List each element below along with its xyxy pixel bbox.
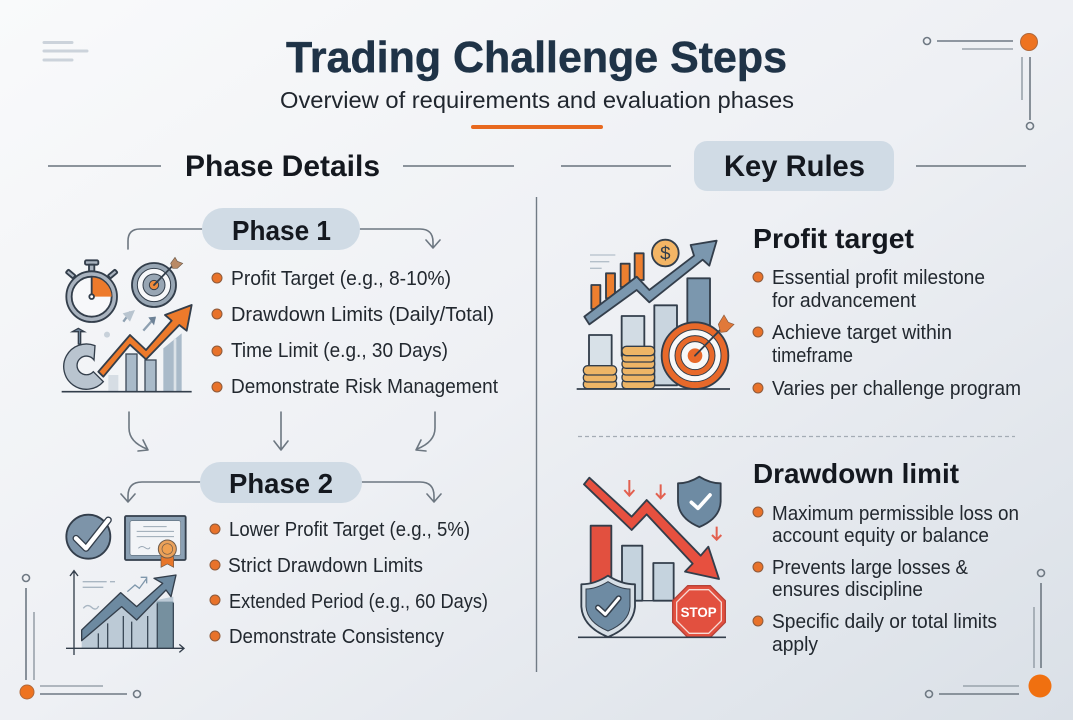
Drawdown limit bullet list: ensures discipline xyxy=(772,579,923,601)
Phase 1 pill xyxy=(202,208,360,250)
icon: profit chart, coins and target: $ xyxy=(660,243,671,264)
icon: stopwatch, target and rising arrow xyxy=(62,257,192,392)
Profit target bullet list: Essential profit milestone xyxy=(772,267,985,289)
icon: falling arrow, shields and stop sign xyxy=(578,477,726,637)
panel: Drawdown limit xyxy=(578,458,1019,656)
Profit target bullet list: Varies per challenge program xyxy=(772,378,1021,400)
Profit target bullet list: Achieve target within xyxy=(772,322,952,344)
subtitle: Overview of requirements and evaluation phases xyxy=(280,87,794,113)
column divider xyxy=(536,197,538,672)
Phase 1 bullet list xyxy=(212,268,498,398)
Phase 2 bullet list: Extended Period (e.g., 60 Days) xyxy=(229,591,488,613)
Phase 2 bullet list xyxy=(210,519,488,648)
Drawdown limit bullet list: Prevents large losses & xyxy=(772,557,969,579)
Phase 1 bullet list: Demonstrate Risk Management xyxy=(231,376,498,398)
Phase 1 bullet list: Time Limit (e.g., 30 Days) xyxy=(231,340,448,362)
corner ornament: bottom right xyxy=(926,570,1052,698)
corner ornament: top right xyxy=(924,34,1038,130)
row divider xyxy=(578,436,1015,438)
Phase 2 pill xyxy=(200,462,362,503)
panel: Phase 1 xyxy=(62,208,498,398)
arrows: Phase 1 to Phase 2 xyxy=(129,412,435,451)
heading: Key Rules xyxy=(561,141,1026,191)
corner ornament: bottom left xyxy=(20,574,140,699)
title: Trading Challenge Steps xyxy=(286,33,787,82)
Drawdown limit bullet list: account equity or balance xyxy=(772,525,989,547)
Profit target bullet list xyxy=(753,267,1021,400)
heading: Key Rules: Key Rules xyxy=(724,150,865,183)
Drawdown limit bullet list: apply xyxy=(772,634,818,656)
Drawdown limit bullet list: Maximum permissible loss on xyxy=(772,503,1019,525)
panel: Phase 2 xyxy=(66,462,488,655)
panel: Profit target xyxy=(577,223,1021,400)
Phase 1 pill: Phase 1 xyxy=(232,215,331,246)
title accent bar xyxy=(471,125,603,129)
Phase 2 bullet list: Lower Profit Target (e.g., 5%) xyxy=(229,519,470,541)
Phase 2 bullet list: Demonstrate Consistency xyxy=(229,626,444,648)
icon: profit chart, coins and target xyxy=(577,240,734,389)
Phase 2 bullet list: Strict Drawdown Limits xyxy=(228,555,423,577)
Phase 2 connectors xyxy=(121,482,441,502)
heading: Drawdown limit: Drawdown limit xyxy=(753,458,959,489)
Drawdown limit bullet list: Specific daily or total limits xyxy=(772,611,997,633)
icon: top-left menu lines xyxy=(44,42,87,60)
icon: checkmark, certificate and chart xyxy=(66,515,186,655)
heading: Phase Details: Phase Details xyxy=(185,150,380,183)
Phase 1 bullet list: Drawdown Limits (Daily/Total) xyxy=(231,304,494,326)
Profit target bullet list: for advancement xyxy=(772,290,916,312)
Phase 2 pill: Phase 2 xyxy=(229,468,333,499)
Profit target bullet list: timeframe xyxy=(772,345,853,367)
Phase 1 bullet list: Profit Target (e.g., 8-10%) xyxy=(231,268,451,290)
Drawdown limit bullet list xyxy=(753,503,1019,656)
heading: Profit target: Profit target xyxy=(753,223,914,254)
icon: falling arrow, shields and stop sign: STOP xyxy=(681,604,717,620)
Phase 1 connectors xyxy=(128,229,440,249)
